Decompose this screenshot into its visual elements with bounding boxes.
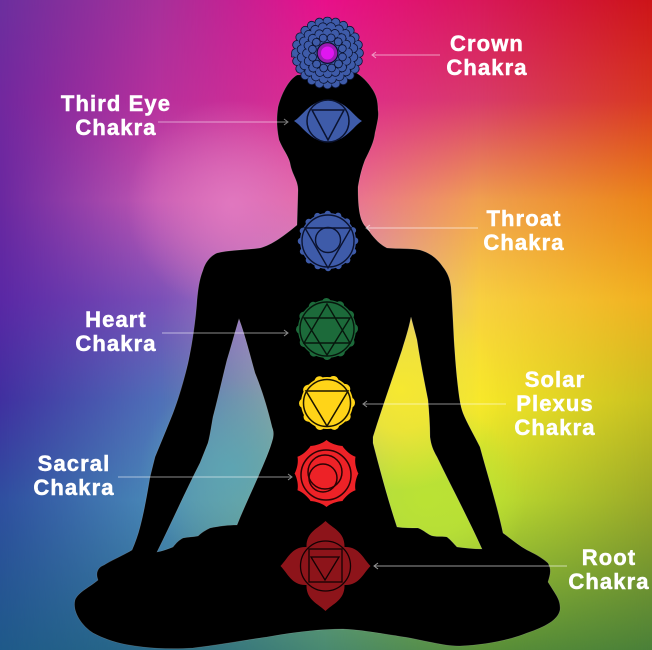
label: solar plexus chakra: Chakra	[514, 415, 596, 440]
label: sacral chakra	[33, 451, 115, 500]
label: heart chakra: Chakra	[75, 331, 157, 356]
label: sacral chakra: Chakra	[33, 475, 115, 500]
label: solar plexus chakra	[514, 367, 596, 440]
label: crown chakra: Chakra	[446, 55, 528, 80]
label: crown chakra	[446, 31, 528, 80]
label: throat chakra: Chakra	[483, 230, 565, 255]
label: root chakra: Root	[582, 545, 636, 570]
arrow: root	[374, 563, 567, 569]
arrow: throat	[366, 225, 478, 231]
label: throat chakra	[483, 206, 565, 255]
label: root chakra	[568, 545, 650, 594]
arrow: third eye	[158, 119, 288, 125]
arrow: crown	[372, 52, 440, 58]
label: third eye chakra: Third Eye	[61, 91, 171, 116]
chakra: heart	[298, 300, 356, 358]
chakra: third eye	[294, 100, 362, 142]
arrow: sacral	[118, 474, 292, 480]
chakra: root	[280, 521, 370, 611]
label: crown chakra: Crown	[450, 31, 524, 56]
label: solar plexus chakra: Plexus	[516, 391, 594, 416]
label: heart chakra: Heart	[85, 307, 147, 332]
arrow: solar plexus	[363, 401, 506, 407]
label: solar plexus chakra: Solar	[525, 367, 585, 392]
label: third eye chakra	[60, 91, 171, 140]
label: root chakra: Chakra	[568, 569, 650, 594]
chakra: solar plexus	[301, 377, 353, 429]
label: throat chakra: Throat	[486, 206, 562, 231]
label: heart chakra	[75, 307, 157, 356]
chakra: throat	[300, 213, 356, 269]
chakra: crown	[296, 22, 359, 84]
label: third eye chakra: Chakra	[75, 115, 157, 140]
chakra: sacral	[289, 440, 364, 507]
silhouette	[74, 72, 560, 649]
label: sacral chakra: Sacral	[38, 451, 110, 476]
arrow: heart	[162, 330, 288, 336]
